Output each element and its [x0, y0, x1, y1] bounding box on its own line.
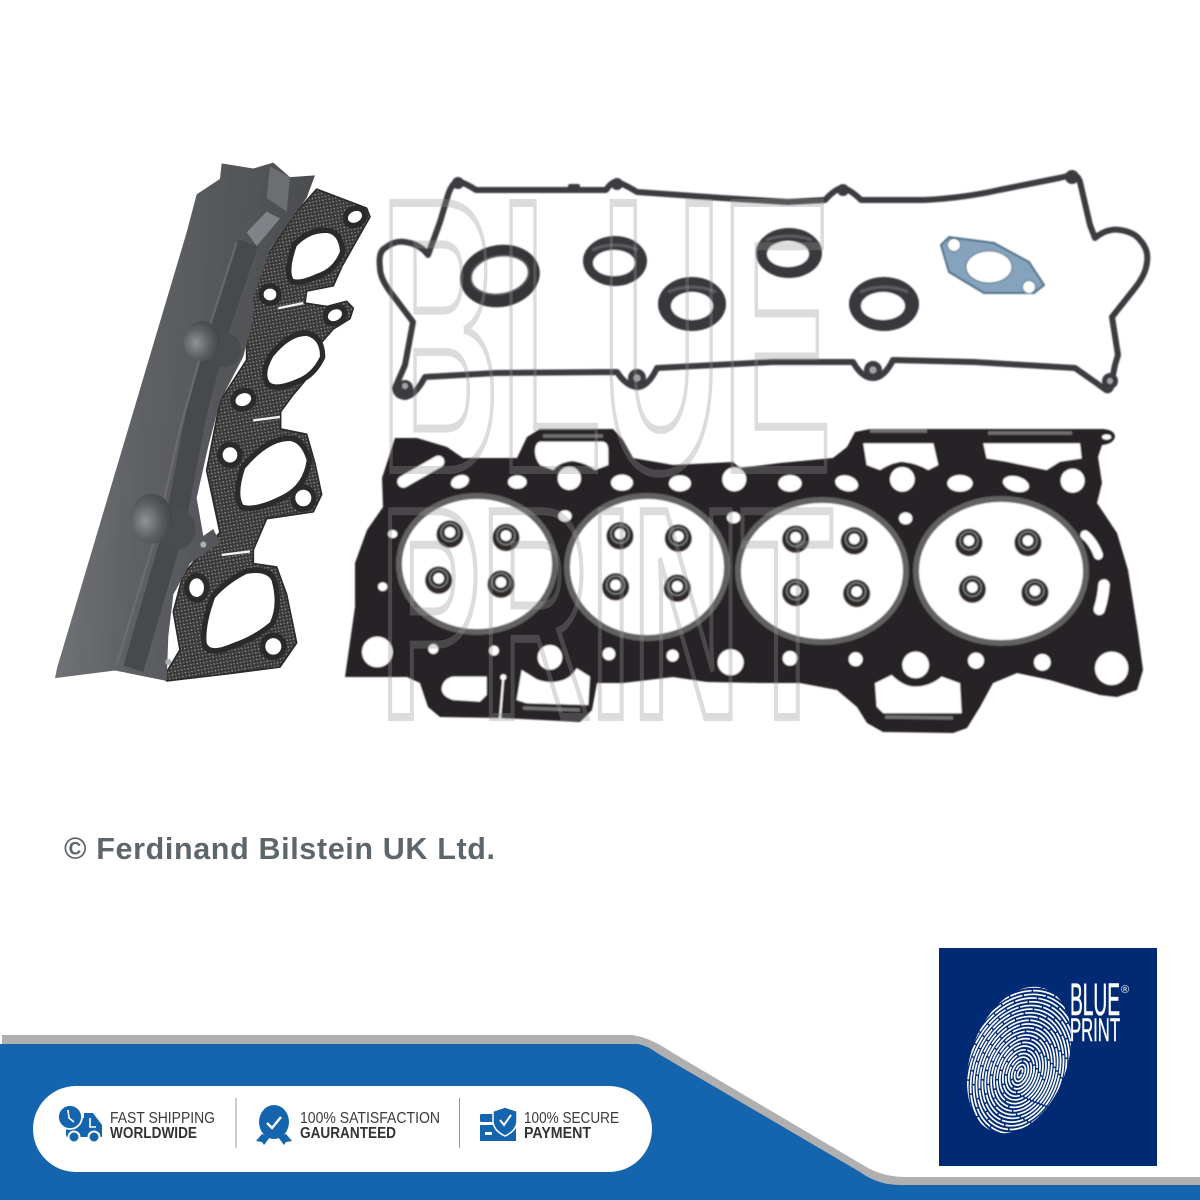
- heat shield: [55, 163, 315, 681]
- icon: satisfaction ribbon badge: [256, 1105, 292, 1145]
- valve stem seals: [425, 520, 692, 602]
- text: satisfaction: [300, 1110, 440, 1142]
- divider: [459, 1098, 460, 1148]
- gasket mounting ears: [397, 170, 1118, 396]
- text: secure payment: 100% SECURE: [524, 1110, 619, 1127]
- white badge pill: [33, 1086, 652, 1172]
- manifold gasket body: [163, 189, 370, 681]
- silver bars on gasket: [523, 431, 1072, 718]
- right half openings: [778, 434, 1128, 713]
- icon: fingerprint: [967, 986, 1071, 1134]
- text: fast shipping: FAST SHIPPING: [110, 1110, 215, 1127]
- icon: fast shipping truck: [58, 1105, 102, 1142]
- left half openings: [362, 442, 746, 718]
- logo text: ®: [1121, 984, 1129, 996]
- copyright line: © Ferdinand Bilstein UK Ltd.: [64, 832, 495, 866]
- footer band: grey edge: [2, 1035, 1200, 1190]
- valve cover outline gasket: [380, 175, 1147, 397]
- text: secure payment: [524, 1110, 619, 1142]
- photo: exhaust manifold gasket and heat shield: [55, 163, 370, 681]
- valve stem seals right: [782, 525, 1049, 607]
- head gasket body: [345, 429, 1143, 733]
- icon: secure payment card and shield: [480, 1107, 517, 1141]
- text: fast shipping: [110, 1110, 215, 1142]
- footer band: blue: [0, 1044, 1200, 1200]
- text: secure payment: PAYMENT: [524, 1125, 591, 1142]
- cylinder bores: [399, 496, 1086, 643]
- text: satisfaction: GAURANTEED: [300, 1125, 396, 1142]
- text: satisfaction: 100% SATISFACTION: [300, 1110, 440, 1127]
- text: fast shipping: WORLDWIDE: [110, 1125, 197, 1142]
- photo: valve cover gasket with seals: [380, 170, 1147, 397]
- logo text: BLUE: [1070, 974, 1120, 1025]
- logo: Blue Print square: [930, 948, 1157, 1178]
- photo: cylinder head gasket: [345, 429, 1143, 733]
- logo text: [1070, 974, 1129, 1048]
- logo text: PRINT: [1070, 1012, 1120, 1048]
- blue paper gasket: [941, 237, 1044, 294]
- watermark: BLUE PRINT: [380, 120, 833, 781]
- divider: [236, 1098, 237, 1148]
- oil seals: [455, 228, 919, 331]
